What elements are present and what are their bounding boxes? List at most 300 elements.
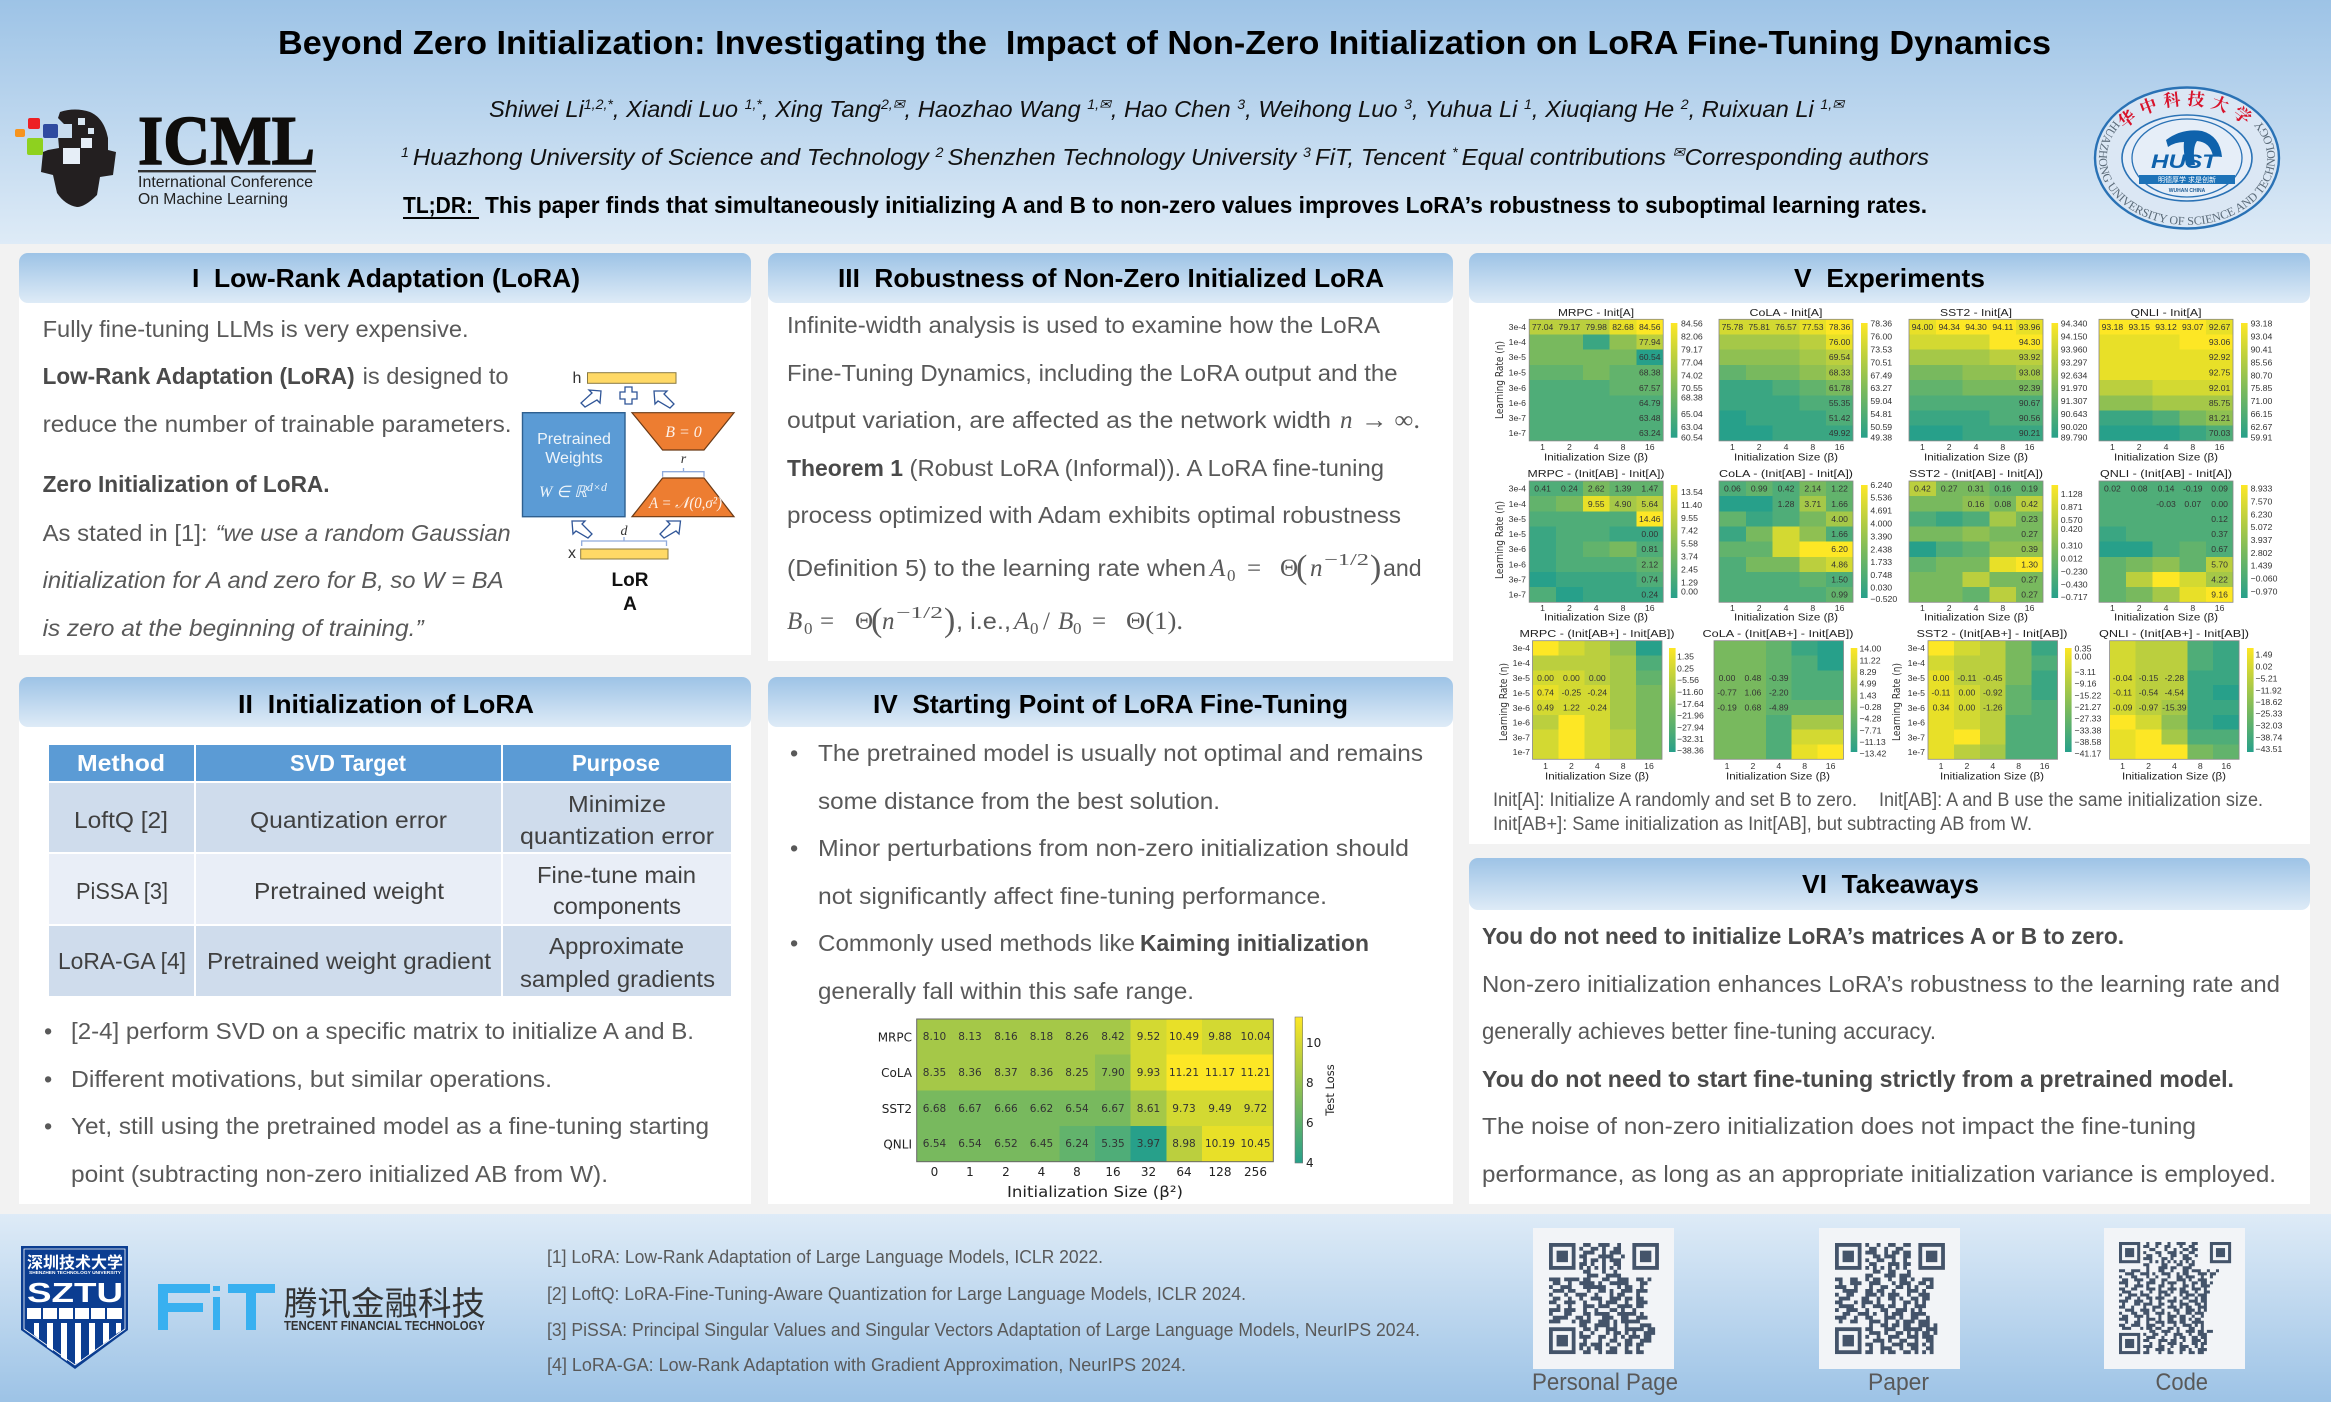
chart: test loss heatmap: SST2 [882, 1102, 912, 1116]
chart: MRPC Init[A]: 16 [1645, 442, 1655, 452]
chart: QNLI Init[A]: 71.00 [2251, 396, 2273, 406]
QR code: personal page [1533, 1228, 1674, 1369]
chart: SST2 AB+ minus AB: -0.11 [1932, 688, 1951, 698]
chart: QNLI Init[A]: 62.67 [2251, 422, 2273, 432]
box: pretrained weights: Pretrained [537, 431, 611, 448]
affiliations: 1 [401, 144, 413, 160]
chart: MRPC Init[A]: 3e-6 [1509, 383, 1526, 393]
authors: , Haozhao Wang [905, 96, 1087, 122]
chart: SST2 AB+ minus AB: −41.17 [2074, 748, 2101, 758]
chart: CoLA AB+ minus AB: 1.06 [1745, 688, 1761, 698]
chart: test loss heatmap: CoLA [881, 1066, 913, 1080]
chart: MRPC AB minus A: 0.00 [1641, 529, 1658, 539]
affiliations: Shenzhen Technology University [947, 144, 1303, 170]
chart: test loss heatmap: 6.45 [1030, 1138, 1053, 1150]
chart: MRPC AB minus A: 0.74 [1641, 574, 1658, 584]
chart: test loss heatmap [878, 1017, 1337, 1201]
trapezoid: B [632, 413, 734, 450]
chart: CoLA AB+ minus AB: −11.13 [1860, 737, 1886, 747]
chart: test loss heatmap: 6.66 [994, 1103, 1018, 1115]
text block: theorem: n [1310, 555, 1322, 582]
chart: MRPC AB minus A: 0.00 [1681, 587, 1698, 597]
chart: MRPC AB minus A: 3e-7 [1509, 574, 1526, 584]
icon: plus [620, 387, 637, 404]
chart: MRPC AB+ minus AB: −21.96 [1677, 711, 1704, 721]
trapezoid: B: B = 0 [665, 424, 702, 441]
chart: SST2 AB minus A: 0.27 [2021, 529, 2038, 539]
chart: MRPC Init[A]: 64.79 [1639, 398, 1661, 408]
chart: SST2 Init[A]: 90.21 [2019, 428, 2041, 438]
chart: SST2 AB minus A: 0.27 [1941, 484, 1958, 494]
chart: SST2 AB minus A: 16 [2025, 603, 2035, 613]
chart: CoLA AB minus A: 1.733 [1870, 557, 1892, 567]
diagram: LoRA architecture: h [573, 370, 581, 387]
chart: SST2 Init[A]: 8 [2000, 442, 2005, 452]
chart: QNLI AB minus A: −0.060 [2251, 574, 2278, 584]
chart: MRPC AB minus A: 0.41 [1534, 484, 1551, 494]
text block: theorem: Theorem 1 [787, 455, 903, 481]
chart: CoLA AB+ minus AB: −0.28 [1860, 702, 1882, 712]
chart: test loss heatmap: 8 [1073, 1165, 1081, 1179]
chart: SST2 Init[A]: SST2 - Init[A] [1940, 307, 2012, 319]
chart: MRPC AB+ minus AB: 8 [1621, 761, 1626, 771]
chart: MRPC AB minus A: 14.46 [1639, 514, 1661, 524]
chart: MRPC Init[A]: 1e-7 [1509, 428, 1526, 438]
chart: CoLA Init[A]: Initialization Size (β) [1734, 452, 1838, 464]
text block: theorem: = [820, 608, 834, 635]
chart: QNLI Init[A]: 80.70 [2251, 370, 2273, 380]
chart: MRPC AB minus A: 1.39 [1615, 484, 1632, 494]
chart: SST2 Init[A]: 93.08 [2019, 368, 2041, 378]
logo: SZTU shield [21, 1246, 128, 1369]
chart: CoLA AB minus A: 1.66 [1831, 499, 1848, 509]
chart: CoLA AB+ minus AB: 4 [1776, 761, 1781, 771]
bullet list: IV: some distance from the best solution. [818, 788, 1220, 814]
text block: LoRA intro: Fully fine-tuning LLMs is very expensive. [43, 316, 469, 342]
chart: CoLA AB minus A: 0.748 [1870, 570, 1892, 580]
chart: QNLI Init[A]: 93.12 [2155, 322, 2177, 332]
chart: MRPC AB+ minus AB: −32.31 [1677, 734, 1704, 744]
chart: SST2 Init[A]: 89.790 [2061, 433, 2088, 443]
chart: SST2 Init[A]: 94.34 [1938, 322, 1960, 332]
bullet list: IV: The pretrained model is usually not optimal and remains [818, 740, 1423, 766]
chart: CoLA AB minus A: 3.71 [1804, 499, 1821, 509]
table: methods: components [553, 893, 681, 919]
chart: CoLA AB minus A: 0.06 [1724, 484, 1741, 494]
chart: QNLI Init[A]: 16 [2215, 442, 2225, 452]
bullet list: II: Yet, still using the pretrained model as a fine-tuning starting [71, 1113, 709, 1139]
chart: CoLA Init[A]: 63.27 [1870, 383, 1892, 393]
chart: QNLI Init[A]: 93.15 [2128, 322, 2150, 332]
chart: SST2 AB minus A: 0.27 [2021, 574, 2038, 584]
chart: test loss heatmap: 8.98 [1172, 1138, 1196, 1150]
chart: MRPC AB minus A: 9.55 [1588, 499, 1605, 509]
chart: MRPC AB minus A: 4 [1594, 603, 1599, 613]
chart: SST2 Init[A]: Initialization Size (β) [1924, 452, 2028, 464]
chart: MRPC AB minus A: 0.81 [1641, 544, 1658, 554]
chart: SST2 AB+ minus AB: 4 [1990, 761, 1995, 771]
chart: MRPC AB+ minus AB [1498, 628, 1704, 782]
box: pretrained weights [522, 413, 625, 517]
chart: test loss heatmap: 9.93 [1137, 1067, 1160, 1079]
chart: MRPC AB minus A: 9.55 [1681, 513, 1698, 523]
chart: SST2 AB minus A: −0.230 [2061, 566, 2088, 576]
chart: CoLA AB minus A: 5.536 [1870, 493, 1892, 503]
diagram: LoRA architecture: x [568, 545, 576, 562]
chart: QNLI AB minus A: 3.937 [2251, 535, 2273, 545]
header banner [0, 0, 2331, 244]
chart: test loss heatmap: 6.54 [1065, 1103, 1089, 1115]
chart: QNLI AB+ minus AB: -0.11 [2113, 688, 2132, 698]
label: Personal Page: Personal Page [1532, 1369, 1678, 1396]
chart: MRPC AB minus A: 1.47 [1641, 484, 1658, 494]
arrow: lower right [660, 521, 680, 538]
chart: CoLA Init[A]: 49.92 [1829, 428, 1851, 438]
chart: MRPC AB+ minus AB: 1 [1543, 761, 1548, 771]
chart: QNLI AB minus A: 0.08 [2131, 484, 2148, 494]
chart: test loss heatmap: 3.97 [1137, 1138, 1160, 1150]
chart: SST2 Init[A]: 94.150 [2061, 332, 2088, 342]
chart: MRPC AB+ minus AB: 0.74 [1537, 688, 1554, 698]
chart: test loss heatmap: 10.19 [1205, 1138, 1235, 1150]
chart: MRPC Init[A]: 68.38 [1681, 392, 1703, 402]
chart: SST2 AB minus A: 0.31 [1968, 484, 1985, 494]
chart: CoLA AB minus A: 2.14 [1804, 484, 1821, 494]
chart: SST2 Init[A]: 93.96 [2019, 322, 2041, 332]
chart: test loss heatmap: 4 [1306, 1156, 1314, 1170]
authors: Shiwei Li [489, 96, 583, 122]
chart: QNLI AB minus A: 5.70 [2211, 559, 2228, 569]
chart: test loss heatmap: 6.24 [1065, 1138, 1089, 1150]
chart: test loss heatmap: MRPC [878, 1030, 912, 1044]
chart: MRPC Init[A]: 70.55 [1681, 383, 1703, 393]
affiliations: * [1452, 144, 1462, 160]
chart: test loss heatmap: Initialization Size (β²) [1007, 1183, 1183, 1201]
text block: theorem: A [1208, 555, 1226, 582]
bullet list: II: • [44, 1018, 52, 1044]
chart: CoLA AB+ minus AB: -4.89 [1769, 702, 1789, 712]
chart: SST2 Init[A]: 93.92 [2019, 352, 2041, 362]
chart: CoLA AB+ minus AB: −7.71 [1860, 725, 1882, 735]
chart: CoLA Init[A]: 16 [1835, 442, 1845, 452]
chart: CoLA AB minus A: 1.50 [1831, 574, 1848, 584]
text block: theorem: 0 [1073, 619, 1082, 638]
chart: QNLI AB+ minus AB: -0.54 [2139, 688, 2159, 698]
chart: SST2 AB minus A [1909, 468, 2088, 624]
logo: FiT [158, 1284, 275, 1330]
chart: CoLA Init[A]: 68.33 [1829, 368, 1851, 378]
text block: takeaways [1482, 923, 2280, 1187]
chart: MRPC Init[A]: 79.17 [1559, 322, 1580, 332]
chart: SST2 AB+ minus AB: 3e-4 [1908, 643, 1925, 653]
chart: SST2 AB minus A: 1 [1920, 603, 1925, 613]
chart: test loss heatmap: QNLI [883, 1138, 912, 1152]
chart: SST2 Init[A] [1909, 307, 2088, 464]
chart: QNLI AB+ minus AB: -0.15 [2139, 673, 2159, 683]
chart: MRPC AB+ minus AB: Initialization Size (β) [1545, 770, 1649, 782]
chart: MRPC Init[A]: 65.04 [1681, 409, 1703, 419]
chart: MRPC AB minus A: 3.74 [1681, 552, 1698, 562]
chart: CoLA Init[A]: CoLA - Init[A] [1750, 307, 1823, 319]
chart: CoLA AB minus A: 4 [1784, 603, 1789, 613]
chart: CoLA AB minus A: 2 [1757, 603, 1762, 613]
chart: SST2 Init[A]: 90.67 [2019, 398, 2041, 408]
logo: ICML [15, 103, 316, 208]
chart: SST2 AB+ minus AB: 1e-7 [1908, 747, 1925, 757]
chart: CoLA AB+ minus AB: 4.99 [1860, 679, 1877, 689]
chart: SST2 AB minus A: 0.19 [2021, 484, 2038, 494]
bullet list: II: • [44, 1113, 52, 1139]
chart: CoLA AB minus A: 4.00 [1831, 514, 1848, 524]
authors: , Hao Chen [1111, 96, 1237, 122]
logo text: Tencent FiT: TENCENT FINANCIAL TECHNOLOGY [284, 1318, 485, 1333]
chart: MRPC AB+ minus AB: 1e-4 [1513, 658, 1530, 668]
chart: MRPC Init[A]: 3e-7 [1509, 413, 1526, 423]
chart: MRPC AB+ minus AB: 1.35 [1677, 652, 1694, 662]
authors: 3 [1237, 96, 1245, 112]
chart: MRPC AB minus A: 1e-4 [1509, 499, 1526, 509]
authors: 3 [1404, 96, 1412, 112]
chart: SST2 AB+ minus AB: −21.27 [2074, 702, 2101, 712]
chart: SST2 Init[A]: 2 [1947, 442, 1952, 452]
chart: QNLI Init[A]: 59.91 [2251, 433, 2273, 443]
chart: MRPC Init[A]: 1e-4 [1509, 337, 1526, 347]
chart: SST2 AB+ minus AB: SST2 - (Init[AB+] - Init[AB]) [1916, 628, 2068, 640]
chart: MRPC Init[A]: 3e-5 [1509, 352, 1526, 362]
chart: SST2 Init[A]: 91.307 [2061, 396, 2088, 406]
chart: SST2 AB+ minus AB: −3.11 [2074, 667, 2096, 677]
chart: test loss heatmap: 8.36 [958, 1067, 982, 1079]
chart: CoLA Init[A]: 4 [1784, 442, 1789, 452]
logo: HUST seal: WUHAN CHINA [2169, 188, 2206, 194]
bullet list: IV [790, 740, 1423, 1004]
chart: SST2 Init[A]: 93.960 [2061, 344, 2088, 354]
logo: HUST seal: HUST [2151, 152, 2219, 173]
chart: QNLI AB minus A [2099, 468, 2278, 624]
table: methods: Minimize [568, 791, 666, 817]
text block: theorem: Fine-Tuning Dynamics, including the LoRA output and the [787, 360, 1398, 386]
chart: MRPC AB minus A: 2.45 [1681, 564, 1698, 574]
box: pretrained weights: W ∈ ℝ [539, 484, 587, 501]
diagram: LoRA architecture: A [623, 594, 637, 615]
text block: theorem: ) [944, 602, 955, 639]
chart: QNLI AB minus A: −0.970 [2251, 587, 2278, 597]
text block: theorem: 0 [1030, 619, 1038, 638]
chart: SST2 AB minus A: −0.430 [2061, 579, 2088, 589]
chart: MRPC AB minus A [1494, 468, 1703, 624]
chart: MRPC AB minus A: 7.42 [1681, 526, 1698, 536]
chart: SST2 AB+ minus AB: −9.16 [2074, 679, 2097, 689]
text block: theorem: (Definition 5) to the learning rate when [787, 555, 1206, 581]
chart: MRPC AB minus A: 1e-7 [1509, 590, 1526, 600]
chart: MRPC AB+ minus AB: 0.49 [1537, 702, 1554, 712]
chart: SST2 AB minus A: −0.717 [2061, 592, 2088, 602]
chart: SST2 AB+ minus AB: 3e-6 [1908, 703, 1925, 713]
chart: SST2 AB+ minus AB: 3e-7 [1908, 732, 1925, 742]
chart: SST2 Init[A]: 92.39 [2019, 383, 2041, 393]
chart: CoLA Init[A] [1719, 307, 1892, 464]
chart: CoLA Init[A]: 76.00 [1829, 337, 1851, 347]
chart: SST2 Init[A]: 92.634 [2061, 370, 2088, 380]
chart: CoLA AB+ minus AB: −4.28 [1860, 714, 1882, 724]
affiliations: Equal contributions [1462, 144, 1673, 170]
chart: MRPC AB minus A: MRPC - (Init[AB] - Init[A]) [1528, 468, 1664, 480]
chart: CoLA AB+ minus AB: 0.68 [1745, 702, 1761, 712]
chart: QNLI AB+ minus AB: -2.28 [2165, 673, 2184, 683]
bullet list: IV: Minor perturbations from non-zero initialization should [818, 835, 1409, 861]
chart: CoLA AB+ minus AB: 16 [1826, 761, 1836, 771]
chart: test loss heatmap: 6.67 [958, 1103, 982, 1115]
chart: MRPC AB+ minus AB: −38.36 [1677, 746, 1704, 756]
table: methods: LoftQ [2] [74, 807, 168, 833]
chart: SST2 AB+ minus AB [1891, 628, 2101, 782]
chart: MRPC AB minus A: 2.62 [1588, 484, 1605, 494]
chart: CoLA AB minus A: 2.438 [1870, 544, 1892, 554]
TL;DR: TL;DR: [403, 192, 473, 218]
bullet list: IV: • [790, 740, 798, 766]
chart: CoLA AB minus A: 4.86 [1831, 559, 1848, 569]
text block: theorem: / [1043, 608, 1050, 635]
chart: SST2 Init[A]: 94.340 [2061, 319, 2088, 329]
arrow: up left [654, 391, 674, 408]
affiliations: Corresponding authors [1685, 144, 1929, 170]
chart: MRPC Init[A]: 82.06 [1681, 332, 1703, 342]
chart: CoLA AB minus A: 16 [1835, 603, 1845, 613]
bullet list: II: Different motivations, but similar operations. [71, 1066, 552, 1092]
chart: CoLA Init[A]: 76.57 [1775, 322, 1797, 332]
chart: test loss heatmap: 9.73 [1172, 1103, 1196, 1115]
chart: QNLI Init[A]: 70.03 [2209, 428, 2231, 438]
chart: SST2 Init[A]: 94.30 [2019, 337, 2041, 347]
chart: MRPC Init[A]: 79.98 [1585, 322, 1607, 332]
chart: test loss heatmap: 6.54 [958, 1138, 982, 1150]
chart: MRPC AB minus A: 2 [1567, 603, 1572, 613]
chart: MRPC AB minus A: 8 [1621, 603, 1626, 613]
chart: test loss heatmap: 32 [1141, 1165, 1156, 1179]
authors: 2,✉ [880, 96, 907, 112]
chart: test loss heatmap: 8.35 [923, 1067, 946, 1079]
chart: test loss heatmap: 6.54 [923, 1138, 947, 1150]
chart: test loss heatmap: 16 [1105, 1165, 1121, 1179]
chart: MRPC Init[A]: 63.24 [1639, 428, 1661, 438]
chart: CoLA Init[A]: 77.53 [1802, 322, 1824, 332]
chart: CoLA Init[A]: 50.59 [1870, 422, 1892, 432]
chart: SST2 Init[A]: 4 [1974, 442, 1979, 452]
chart: CoLA AB minus A: 1.66 [1831, 529, 1848, 539]
chart: SST2 Init[A]: 90.643 [2061, 409, 2088, 419]
text block: theorem: Infinite-width analysis is used to examine how the LoRA [787, 312, 1380, 338]
chart: QNLI AB minus A: 4 [2164, 603, 2169, 613]
chart: MRPC Init[A]: 68.38 [1639, 368, 1661, 378]
chart: SST2 AB minus A: 0.39 [2021, 544, 2038, 554]
chart: CoLA Init[A]: 1 [1730, 442, 1735, 452]
chart: SST2 AB+ minus AB: 8 [2016, 761, 2021, 771]
panel: IV Starting Point [768, 677, 1453, 1204]
chart: test loss heatmap: 8.61 [1137, 1103, 1160, 1115]
text block: theorem: ( [1296, 549, 1307, 586]
chart: SST2 AB minus A: 0.08 [1994, 499, 2011, 509]
legend notes: Init[A]: Initialize A randomly and set B to zero. [1493, 790, 1857, 811]
text block: LoRA intro: initialization for A and zero for B, so W = BA [43, 567, 504, 593]
chart: CoLA AB minus A: 0.99 [1751, 484, 1768, 494]
text block: theorem: n [1340, 407, 1352, 434]
chart: test loss heatmap: 9.72 [1244, 1103, 1267, 1115]
references: [1] LoRA: Low-Rank Adaptation of Large Language Models, ICLR 2022. [547, 1247, 1103, 1267]
chart: test loss heatmap: 6 [1306, 1116, 1314, 1130]
chart: QNLI Init[A]: 93.18 [2251, 319, 2273, 329]
table: methods: LoRA-GA [4] [58, 948, 186, 974]
logo text: Tencent FiT: 腾讯金融科技 [284, 1285, 485, 1322]
chart: test loss heatmap: 9.49 [1208, 1103, 1232, 1115]
chart: MRPC Init[A]: Learning Rate (η) [1494, 341, 1506, 419]
chart: QNLI AB minus A: 2.802 [2251, 548, 2273, 558]
chart: SST2 AB minus A: 0.570 [2061, 515, 2083, 525]
chart: CoLA AB+ minus AB: 1 [1725, 761, 1730, 771]
chart: MRPC Init[A]: 1 [1540, 442, 1545, 452]
chart: QNLI AB minus A: 5.072 [2251, 522, 2273, 532]
chart: test loss heatmap: 10 [1306, 1036, 1321, 1050]
chart: test loss heatmap: 7.90 [1101, 1067, 1125, 1079]
chart: SST2 Init[A]: 94.11 [1992, 322, 2013, 332]
panel: III Robustness [768, 253, 1453, 661]
chart: MRPC AB+ minus AB: MRPC - (Init[AB+] - Init[AB]) [1520, 628, 1674, 640]
chart: test loss heatmap: 10.45 [1240, 1138, 1271, 1150]
chart: test loss heatmap: 8.37 [994, 1067, 1018, 1079]
chart: QNLI AB minus A: Initialization Size (β) [2114, 612, 2218, 624]
chart: CoLA Init[A]: 67.49 [1870, 370, 1892, 380]
chart: QNLI AB minus A: 6.230 [2251, 509, 2273, 519]
chart: SST2 AB+ minus AB: −27.33 [2074, 714, 2101, 724]
authors: 1,✉ [1087, 96, 1113, 112]
text block: theorem: A [1012, 608, 1030, 635]
heading II: II Initialization of LoRA [238, 689, 534, 719]
logo: SZTU shield: SZTU [27, 1277, 123, 1308]
text block: takeaways: performance, as long as an appropriate initialization variance is employed. [1482, 1161, 2276, 1187]
chart: CoLA AB minus A: 1.28 [1778, 499, 1795, 509]
chart: QNLI Init[A]: 93.06 [2209, 337, 2231, 347]
text block: theorem: (Robust LoRA (Informal)). A LoRA fine-tuning [910, 455, 1384, 481]
chart: QNLI AB+ minus AB: 16 [2221, 761, 2231, 771]
chart: SST2 AB+ minus AB: −38.58 [2074, 737, 2101, 747]
chart: MRPC AB+ minus AB: −17.64 [1677, 699, 1704, 709]
chart: CoLA Init[A]: 8 [1810, 442, 1815, 452]
chart: MRPC Init[A]: 77.94 [1639, 337, 1661, 347]
chart: test loss heatmap: 5.35 [1101, 1138, 1125, 1150]
text block: LoRA intro: reduce the number of trainable parameters. [43, 411, 512, 437]
text block: theorem: = [1247, 555, 1261, 582]
chart: QNLI AB minus A: 4.22 [2211, 574, 2228, 584]
chart: SST2 AB minus A: 0.23 [2021, 514, 2038, 524]
chart: CoLA AB minus A: 3.390 [1870, 531, 1892, 541]
bullet list: IV: Commonly used methods like [818, 930, 1135, 956]
label: Code: Code [2156, 1369, 2208, 1396]
chart: CoLA AB minus A: −0.520 [1870, 594, 1897, 604]
heading IV: IV Starting Point of LoRA Fine-Tuning [873, 689, 1348, 719]
chart: QNLI Init[A]: 85.56 [2251, 357, 2273, 367]
logo: SZTU shield: SHENZHEN TECHNOLOGY UNIVERSITY [29, 1270, 121, 1275]
chart: MRPC Init[A]: 63.04 [1681, 422, 1703, 432]
chart: CoLA AB+ minus AB: 8 [1802, 761, 1807, 771]
chart: test loss heatmap: 11.21 [1240, 1067, 1271, 1079]
chart: MRPC AB+ minus AB: 3e-6 [1513, 703, 1530, 713]
chart: SST2 Init[A]: 90.020 [2061, 422, 2088, 432]
panel: V Experiments [1469, 253, 2310, 844]
chart: QNLI Init[A]: 75.85 [2251, 383, 2273, 393]
chart: MRPC AB minus A: 11.40 [1681, 500, 1702, 510]
heading I: I Low-Rank Adaptation (LoRA) [192, 263, 580, 293]
chart: MRPC Init[A]: 60.54 [1639, 352, 1661, 362]
chart: SST2 AB minus A: 0.16 [1968, 499, 1985, 509]
